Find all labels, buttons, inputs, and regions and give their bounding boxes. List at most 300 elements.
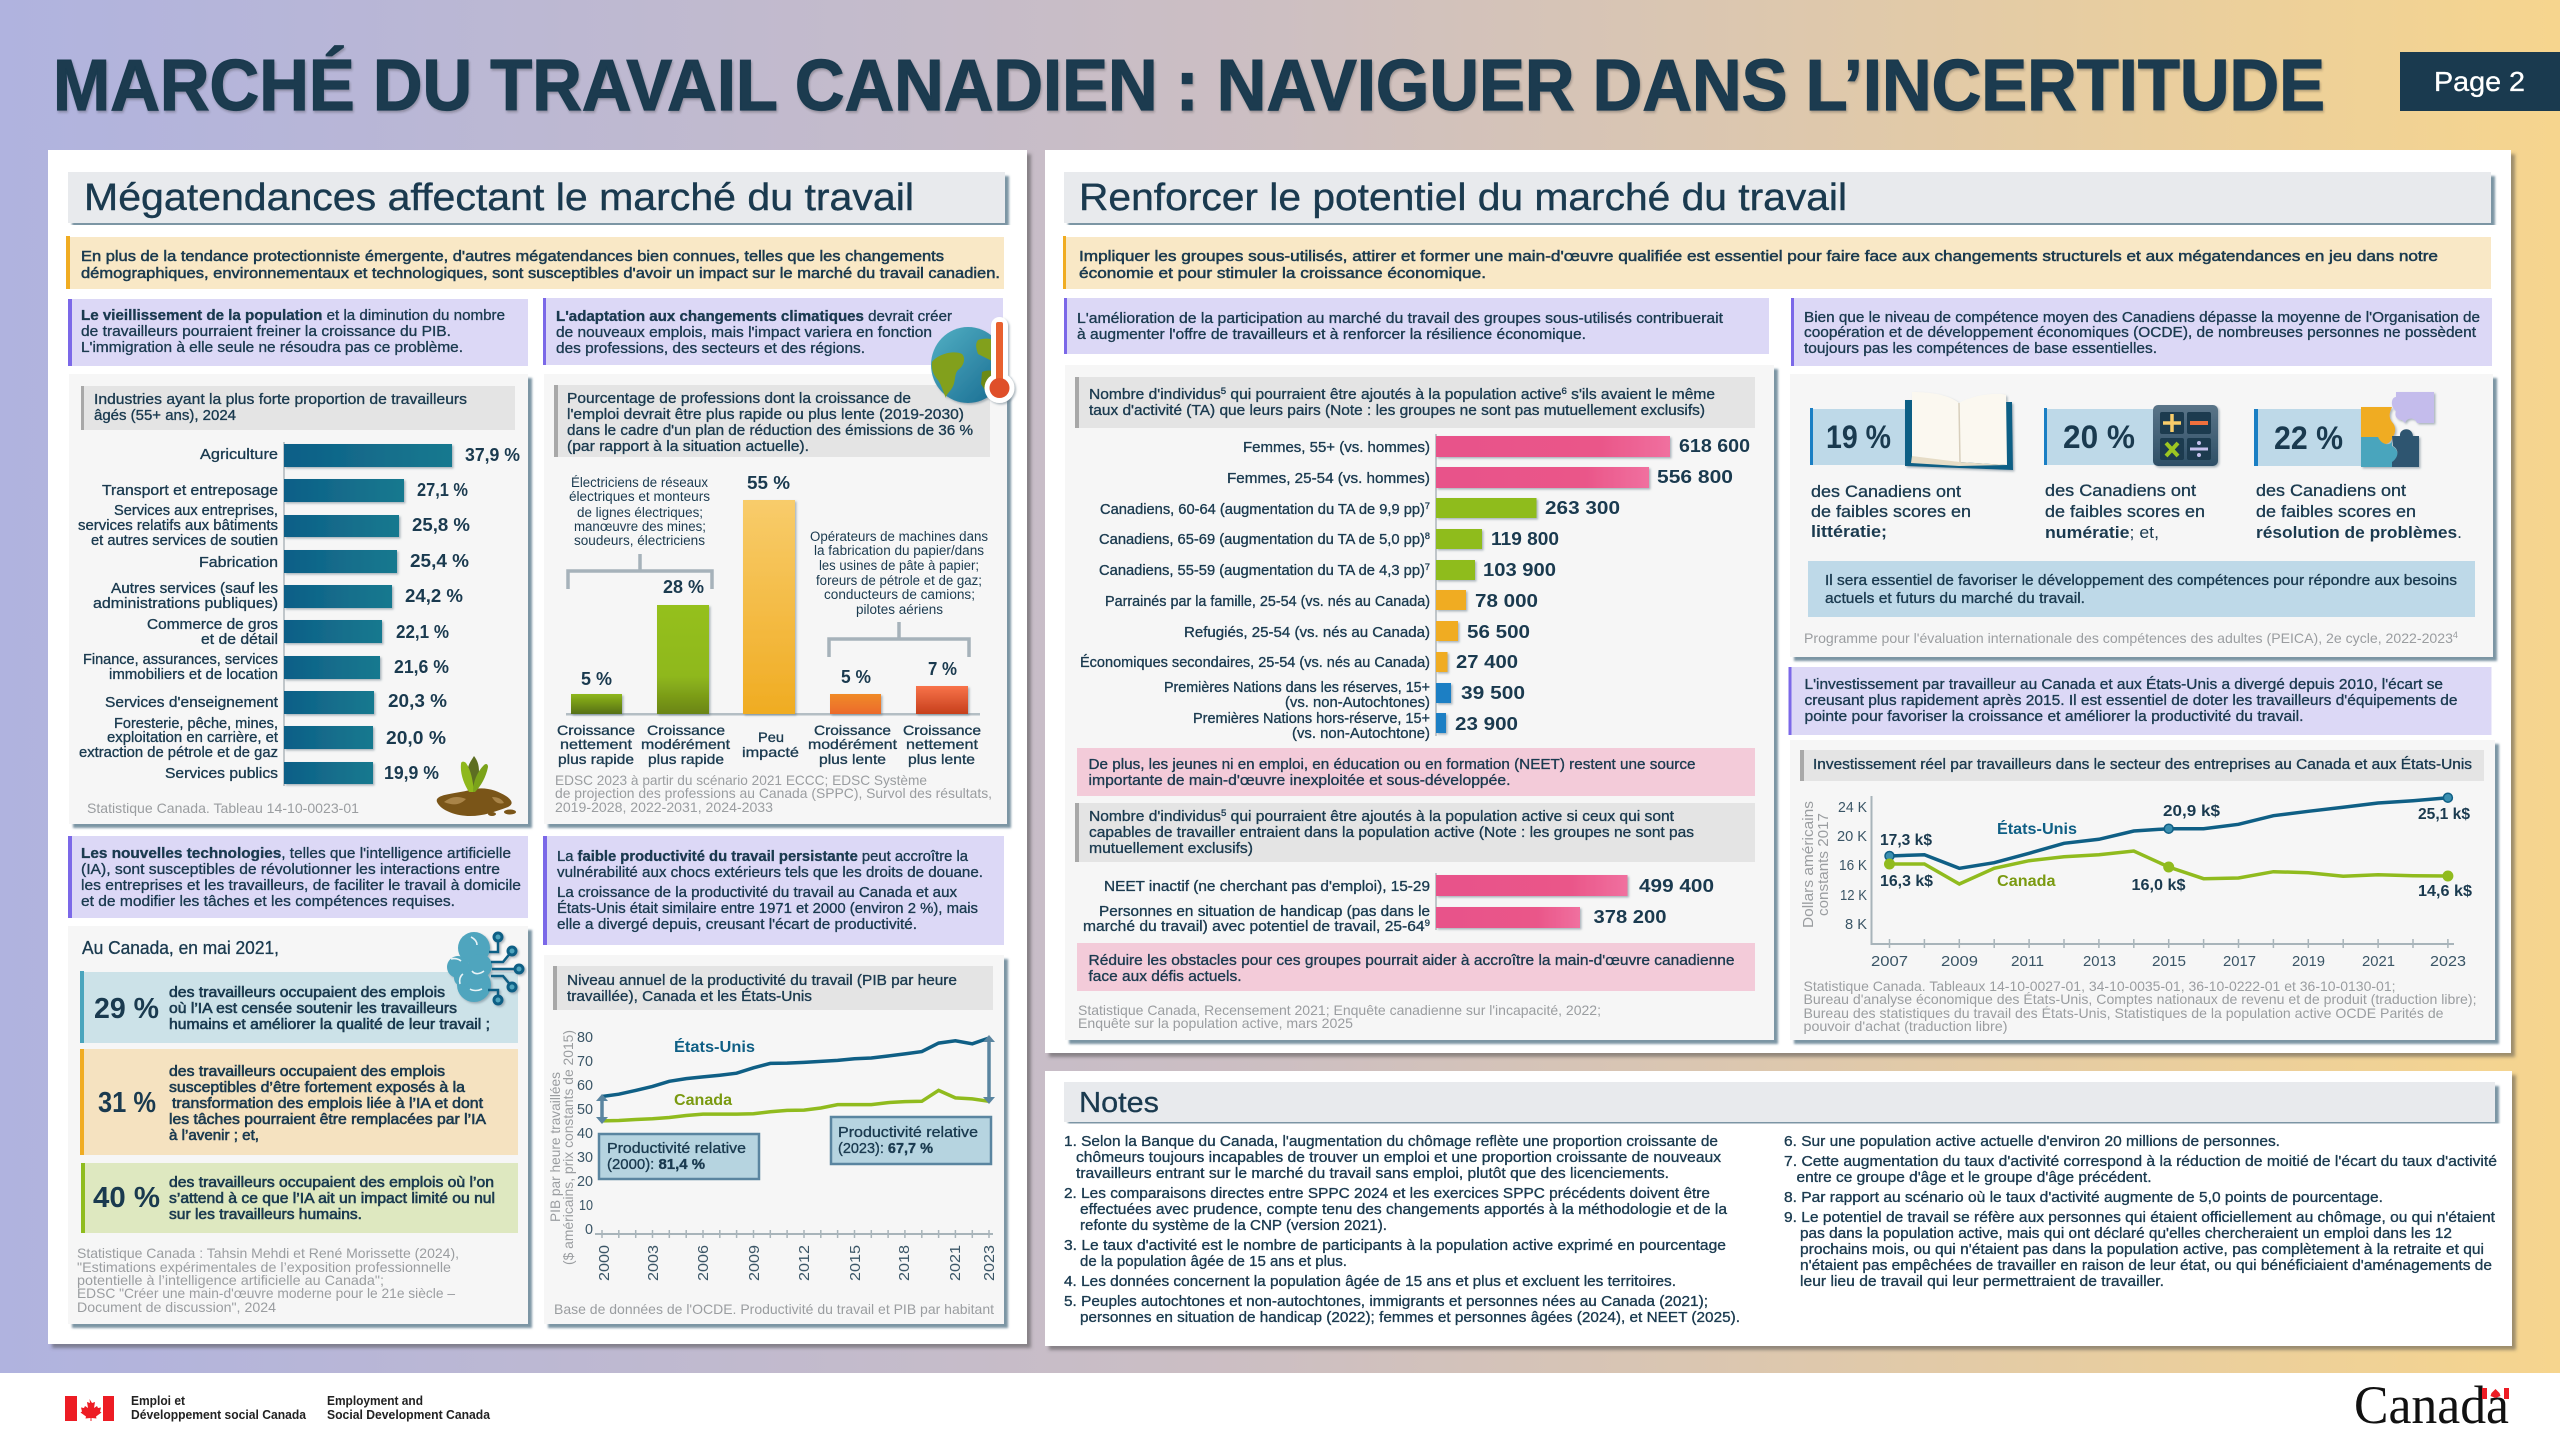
bar chart: industries: 20,3 % xyxy=(388,691,447,711)
card: productivité xyxy=(544,955,1004,1324)
text block: vieillissement: de travailleurs pourraient freiner la croissance du PIB. xyxy=(81,324,451,340)
heading: notes: Notes xyxy=(1079,1087,1159,1119)
stat: littératie: littératie; xyxy=(1811,522,1887,541)
text block: investissement: pointe pour favoriser la croissance et améliorer la productivité du travail. xyxy=(1804,709,2304,725)
annotation: professions en croissance xyxy=(568,475,712,589)
bar chart: groupes sous-utilisés: 7 xyxy=(1425,501,1430,511)
text block: productivité: La faible productivité du travail persistante peut accroître la xyxy=(557,849,969,865)
chart heading: industries xyxy=(81,386,515,430)
source: OCDE: Base de données de l'OCDE. Productivité du travail et PIB par habitant xyxy=(554,1301,994,1317)
callout: développement des compétences: actuels et futurs du marché du travail. xyxy=(1825,591,2085,607)
notes: right column: n'étaient pas empêchées de travailler en raison de leur état, ou qui bénéficiaient d'aménagements de xyxy=(1800,1258,2492,1274)
chart heading: individus 2: Nombre d'individus xyxy=(1089,809,1212,825)
line chart: productivité: 70 xyxy=(577,1054,593,1070)
bar chart: industries: Services d'enseignement xyxy=(105,695,278,711)
stat: 40 %: s’attend à ce que l’IA ait un impact limité ou nul xyxy=(169,1191,495,1207)
text block: compétences OCDE: Bien que le niveau de compétence moyen des Canadiens dépasse la moyenne de l'Organisation de xyxy=(1804,310,2480,326)
footer: government signature xyxy=(65,1393,491,1422)
notes: left column: 2. Les comparaisons directes entre SPPC 2024 et les exercices SPPC précédents doivent être xyxy=(1064,1186,1710,1202)
bar chart: industries: Services aux entreprises, xyxy=(114,503,278,519)
line chart: investissement: 17,3 k$ xyxy=(1880,832,1932,849)
chart heading: investissement: Investissement réel par travailleurs dans le secteur des entreprises au Canada et aux États-Unis xyxy=(1813,756,2472,773)
bar chart: industries: Fabrication xyxy=(199,555,278,571)
chart heading: individus 2: capables de travailler entraient dans la population active (Note : les groupes ne sont pas xyxy=(1089,825,1694,841)
callout: productivité relative 2000: (2000): 81,4 % xyxy=(607,1157,705,1173)
bar chart: professions: Croissance xyxy=(557,722,635,738)
annotation: professions en croissance: soudeurs, électriciens xyxy=(574,533,705,548)
stat: numératie xyxy=(2044,405,2218,542)
stat: 31 %: susceptibles d’être fortement exposés à la xyxy=(169,1080,466,1096)
signature: français xyxy=(131,1393,307,1422)
bar chart: groupes sous-utilisés: 556 800 xyxy=(1657,467,1733,487)
text block: productivité: vulnérabilité aux chocs extérieurs tels que les droits de douane. xyxy=(557,865,983,881)
annotation: professions en croissance: de lignes électriques; xyxy=(577,505,703,520)
callout: obstacles: Réduire les obstacles pour ces groupes pourrait aider à accroître la main-d'œuvre canadienne xyxy=(1088,953,1734,969)
callout: NEET: De plus, les jeunes ni en emploi, en éducation ou en formation (NEET) restent une source xyxy=(1088,757,1696,773)
callout: développement des compétences: Il sera essentiel de favoriser le développement des compétences pour répondre aux besoins xyxy=(1825,573,2457,589)
bar chart: NEET et handicap: 499 400 xyxy=(1639,876,1714,896)
source: IA: EDSC "Créer une main-d'œuvre moderne pour le 21e siècle – xyxy=(77,1285,455,1301)
heading: au Canada: Au Canada, en mai 2021, xyxy=(82,938,279,958)
line chart: productivité: ($ américains, prix constants de 2015) xyxy=(560,1030,576,1265)
bar chart: industries: et autres services de soutien xyxy=(91,533,278,549)
bar chart: professions: Croissance xyxy=(814,722,891,738)
source: investissement: Bureau d'analyse économique des États-Unis, Comptes nationaux de revenu et de produit (traduction libre); xyxy=(1804,991,2476,1007)
chart heading: professions: (par rapport à la situation actuelle). xyxy=(567,439,809,455)
stat: résolution de problèmes: des Canadiens ont xyxy=(2256,481,2406,500)
line chart: productivité: PIB par heure travaillées xyxy=(547,1072,563,1222)
chart heading: individus 2: mutuellement exclusifs) xyxy=(1089,841,1253,857)
bar chart: groupes sous-utilisés: (vs. non-Autochtones) xyxy=(1285,695,1430,711)
line chart: productivité: 2023 xyxy=(982,1245,998,1281)
stat: littératie: des Canadiens ont xyxy=(1811,482,1961,501)
line chart: investissement: 16 K xyxy=(1839,858,1867,874)
bar chart: professions: 7 % xyxy=(928,659,957,679)
line chart: productivité: 0 xyxy=(585,1222,593,1238)
line chart: productivité: États-Unis xyxy=(674,1037,755,1056)
annotation: professions en croissance: manœuvre des mines; xyxy=(574,519,706,534)
bar chart: industries: 20,0 % xyxy=(386,728,446,748)
stat: résolution de problèmes: résolution de problèmes. xyxy=(2256,523,2462,542)
notes: right column: 6. Sur une population active actuelle d'environ 20 millions de personnes. xyxy=(1784,1134,2280,1150)
bar chart: groupes sous-utilisés: 8 xyxy=(1425,531,1430,541)
chart heading: individus 1: qui pourraient être ajoutés à la population active xyxy=(1226,387,1561,403)
stat: 29 %: 29 % xyxy=(94,993,159,1025)
stat: 29 % xyxy=(80,971,518,1043)
bar chart: groupes sous-utilisés: 56 500 xyxy=(1467,622,1530,642)
source: professions: de projection des professions au Canada (SPPC), Survol des résultats, xyxy=(555,785,992,801)
page number badge xyxy=(2400,52,2560,111)
signature: english xyxy=(327,1393,491,1422)
bar chart: industries: Agriculture xyxy=(200,447,278,463)
bar chart: industries: 25,8 % xyxy=(412,515,470,535)
chart heading: individus 1 xyxy=(1075,377,1755,428)
bar chart: industries: immobiliers et de location xyxy=(109,667,278,683)
callout: intro mégatendances: démographiques, environnementaux et technologiques, sont susceptibles d'avoir un impact sur le marché du travail canadien. xyxy=(81,266,1000,282)
source: IA: Document de discussion", 2024 xyxy=(77,1299,276,1315)
stat: numératie: 20 % xyxy=(2063,419,2135,455)
signature: english: Social Development Canada xyxy=(327,1407,491,1422)
source: IA: potentielle à l’intelligence artificielle au Canada"; xyxy=(77,1272,384,1288)
bar chart: industries: 24,2 % xyxy=(405,586,463,606)
line chart: investissement: 2023 xyxy=(2430,954,2466,970)
bar chart: industries: 27,1 % xyxy=(417,480,468,500)
line chart: investissement: 2013 xyxy=(2083,954,2116,970)
source: investissement: Bureau des statistiques du travail des États-Unis, Statistiques de la population active OCDE Parités de xyxy=(1804,1005,2444,1021)
bar chart: industries: Transport et entreposage xyxy=(102,483,278,499)
bar chart: groupes sous-utilisés: 78 000 xyxy=(1475,591,1538,611)
text block: adaptation climatique: L'adaptation aux changements climatiques devrait créer xyxy=(556,309,952,325)
source: professions xyxy=(555,772,992,815)
line chart: investissement: 20,9 k$ xyxy=(2163,803,2220,820)
line chart: productivité: 60 xyxy=(577,1078,593,1094)
source: recensement xyxy=(1078,1002,1601,1031)
bar chart: groupes sous-utilisés: Canadiens, 60-64 (augmentation du TA de 9,9 pp) xyxy=(1100,502,1421,518)
callout: productivité relative 2023: (2023): 67,7 % xyxy=(838,1141,933,1157)
line chart: productivité: 20 xyxy=(577,1174,593,1190)
bar chart: groupes sous-utilisés: Femmes, 25-54 (vs. hommes) xyxy=(1227,471,1430,487)
bar chart: industries: administrations publiques) xyxy=(93,596,278,612)
text block: vieillissement: Le vieillissement de la population et la diminution du nombre xyxy=(81,308,505,324)
annotation: professions en déclin: foreurs de pétrole et de gaz; xyxy=(816,573,982,588)
bar chart: professions: plus rapide xyxy=(648,751,724,767)
bar chart: industries: Autres services (sauf les xyxy=(111,581,278,597)
text block: adaptation climatique: des professions, des secteurs et des régions. xyxy=(556,341,865,357)
chart heading: professions: l'emploi devrait être plus rapide ou plus lente (2019-2030) xyxy=(567,407,964,423)
stat: résolution de problèmes xyxy=(2254,392,2462,542)
panel: renforcer le potentiel xyxy=(1045,150,2511,1053)
chart heading: individus 1: Nombre d'individus xyxy=(1089,387,1212,403)
line chart: investissement: 8 K xyxy=(1845,917,1867,933)
text block: vieillissement xyxy=(68,299,528,366)
notes: left column: effectuées avec prudence, compte tenu des changements apportés à la méthodologie et de la xyxy=(1080,1202,1728,1218)
stat: résolution de problèmes: 22 % xyxy=(2274,420,2343,456)
bar chart: groupes sous-utilisés: 618 600 xyxy=(1679,436,1750,456)
card: investissement réel xyxy=(1790,740,2495,1040)
icon: canadian flag xyxy=(65,1396,114,1421)
card: industries travailleurs âgés xyxy=(69,374,528,824)
bar chart: industries: Services publics xyxy=(165,766,278,782)
bar chart: groupes sous-utilisés: Canadiens, 65-69 (augmentation du TA de 5,0 pp) xyxy=(1099,532,1420,548)
icon: open book xyxy=(1905,392,2013,470)
bar chart: groupes sous-utilisés: Parrainés par la famille, 25-54 (vs. nés au Canada) xyxy=(1105,594,1430,610)
source: industries: Statistique Canada. Tableau 14-10-0023-01 xyxy=(87,800,359,816)
icon: plant in soil xyxy=(437,756,516,816)
line chart: productivité xyxy=(547,1030,998,1281)
chart heading: productivité xyxy=(553,966,993,1010)
callout: productivité relative 2000: Productivité relative xyxy=(607,1141,746,1157)
stat: numératie: de faibles scores en xyxy=(2045,502,2205,521)
notes: left column: 4. Les données concernent la population âgée de 15 ans et plus et excluent les territoires. xyxy=(1064,1274,1676,1290)
bar chart: professions: plus lente xyxy=(819,751,886,767)
callout: NEET xyxy=(1077,748,1755,796)
line chart: productivité: 50 xyxy=(577,1102,593,1118)
source: IA: Statistique Canada : Tahsin Mehdi et René Morissette (2024), xyxy=(77,1245,459,1261)
bar chart: industries: 25,4 % xyxy=(410,551,469,571)
chart heading: individus 1: s'ils avaient le même xyxy=(1567,387,1715,403)
wordmark: Canada: Canada xyxy=(2354,1375,2509,1435)
line chart: investissement: 2015 xyxy=(2152,954,2186,970)
text block: investissement: creusant plus rapidement après 2015. Il est essentiel de doter les travailleurs d'équipements de xyxy=(1804,693,2458,709)
stat: numératie: des Canadiens ont xyxy=(2045,481,2196,500)
line chart: investissement: 25,1 k$ xyxy=(2418,806,2470,823)
bar chart: groupes sous-utilisés: Premières Nations dans les réserves, 15+ xyxy=(1164,680,1430,696)
callout: développement des compétences xyxy=(1808,561,2475,617)
bar chart: industries: extraction de pétrole et de gaz xyxy=(79,745,278,761)
source: PEICA: Programme pour l'évaluation internationale des compétences des adultes (PEICA), 2e cycle, 2022-2023 xyxy=(1804,630,2449,646)
bar chart: NEET et handicap: NEET inactif (ne cherchant pas d'emploi), 15-29 xyxy=(1104,879,1430,895)
icon: brain circuit xyxy=(447,932,523,1004)
line chart: investissement: constants 2017 xyxy=(1815,813,1832,916)
text block: participation: L'amélioration de la participation au marché du travail des groupes sous-utilisés contribuerait xyxy=(1077,311,1723,327)
line chart: investissement: 2011 xyxy=(2011,954,2044,970)
chart heading: professions: Pourcentage de professions dont la croissance de xyxy=(567,391,911,407)
heading: mégatendances xyxy=(68,172,1005,223)
line chart: productivité: 2009 xyxy=(747,1245,763,1281)
line chart: investissement: Canada xyxy=(1997,873,2056,890)
chart heading: investissement xyxy=(1800,750,2484,781)
notes: right column: 8. Par rapport au scénario où le taux d'activité augmente de 5,0 points de pourcentage. xyxy=(1784,1190,2383,1206)
line chart: investissement: 20 K xyxy=(1837,829,1867,845)
source: investissement: Statistique Canada. Tableaux 14-10-0027-01, 34-10-0035-01, 36-10-0222-01 et 36-10-0130-01; xyxy=(1804,978,2396,994)
bar chart: professions xyxy=(557,473,981,767)
annotation: professions en déclin xyxy=(810,529,988,657)
chart heading: industries: Industries ayant la plus forte proportion de travailleurs xyxy=(94,392,467,408)
bar chart: industries xyxy=(78,442,520,786)
chart heading: individus 1: taux d'activité (TA) que leurs pairs (Note : les groupes ne sont pas mutuellement exclusifs) xyxy=(1089,403,1705,419)
text block: compétences OCDE xyxy=(1791,298,2492,366)
text block: nouvelles technologies: les entreprises et les travailleurs, de faciliter le travail à domicile xyxy=(81,878,521,894)
line chart: investissement: 16,3 k$ xyxy=(1880,873,1933,890)
notes: left column: 3. Le taux d'activité est le nombre de participants à la population active exprimé en pourcentage xyxy=(1064,1238,1726,1254)
line chart: investissement: 2021 xyxy=(2362,954,2395,970)
card: compétences xyxy=(1790,374,2493,657)
callout: intro mégatendances xyxy=(66,236,1004,289)
text block: adaptation climatique xyxy=(543,298,1003,365)
notes: right column xyxy=(1784,1134,2497,1290)
source: investissement: pouvoir d'achat (traduction libre) xyxy=(1804,1018,2008,1034)
heading: mégatendances: Mégatendances affectant le marché du travail xyxy=(84,177,914,219)
bar chart: professions: modérément xyxy=(808,736,897,752)
bar chart: groupes sous-utilisés: 119 800 xyxy=(1491,529,1559,549)
callout: intro renforcer xyxy=(1063,236,2491,289)
bar chart: groupes sous-utilisés: 27 400 xyxy=(1456,652,1518,672)
notes: left column xyxy=(1064,1134,1740,1326)
annotation: professions en déclin: Opérateurs de machines dans xyxy=(810,529,988,544)
callout: intro renforcer: économie et pour stimuler la croissance économique. xyxy=(1079,266,1486,282)
line chart: productivité: 2000 xyxy=(597,1245,613,1281)
stat: littératie: de faibles scores en xyxy=(1811,502,1971,521)
stat: littératie xyxy=(1810,392,2013,541)
bar chart: professions: 5 % xyxy=(581,669,612,689)
text block: nouvelles technologies xyxy=(68,836,528,918)
chart heading: individus 2: 5 xyxy=(1221,808,1226,818)
line chart: investissement: 2019 xyxy=(2292,954,2325,970)
source: professions: EDSC 2023 à partir du scénario 2021 ECCC; EDSC Système xyxy=(555,772,927,788)
notes: left column: 1. Selon la Banque du Canada, l'augmentation du chômage reflète une proportion croissante de xyxy=(1064,1134,1718,1150)
callout: NEET: importante de main-d'œuvre inexploitée et sous-développée. xyxy=(1088,773,1510,789)
source: recensement: Statistique Canada, Recensement 2021; Enquête canadienne sur l'incapacité, 2022; xyxy=(1078,1002,1601,1018)
bar chart: professions: nettement xyxy=(560,736,632,752)
heading: renforcer: Renforcer le potentiel du marché du travail xyxy=(1079,177,1847,219)
text block: nouvelles technologies: Les nouvelles technologies , telles que l'intelligence artificielle xyxy=(81,846,511,862)
signature: français: Emploi et xyxy=(131,1393,186,1408)
bar chart: professions: impacté xyxy=(742,744,799,760)
callout: productivité relative 2023: Productivité relative xyxy=(838,1125,978,1141)
bar chart: professions: Peu xyxy=(758,729,784,745)
chart heading: professions: dans le cadre d'un plan de réduction des émissions de 36 % xyxy=(567,423,973,439)
title: MARCHÉ DU TRAVAIL CANADIEN : NAVIGUER DANS L’INCERTITUDE xyxy=(53,46,2325,126)
stat: résolution de problèmes: de faibles scores en xyxy=(2256,502,2416,521)
card: professions plan émissions xyxy=(544,374,1007,824)
stat: 31 %: transformation des emplois liée à l’IA et dont xyxy=(172,1096,483,1112)
bar chart: groupes sous-utilisés: 23 900 xyxy=(1455,714,1518,734)
heading: notes xyxy=(1064,1082,2495,1122)
card: exposition à l'IA xyxy=(68,836,1004,1324)
bar chart: professions: plus lente xyxy=(908,751,975,767)
stat: 40 %: des travailleurs occupaient des emplois où l’on xyxy=(169,1175,494,1191)
stat: 40 % xyxy=(81,1163,518,1233)
stat: numératie: numératie; et, xyxy=(2045,523,2159,542)
bar chart: groupes sous-utilisés: 103 900 xyxy=(1483,560,1556,580)
bar chart: NEET et handicap: 378 200 xyxy=(1594,907,1666,927)
line chart: investissement: 16,0 k$ xyxy=(2132,877,2186,894)
annotation: professions en croissance: Électriciens de réseaux xyxy=(571,475,708,490)
bar chart: NEET et handicap: 9 xyxy=(1425,918,1430,928)
text block: vieillissement: L'immigration à elle seule ne résoudra pas ce problème. xyxy=(81,340,463,356)
stat: 31 %: les tâches pourraient être remplacées par l’IA xyxy=(169,1112,486,1128)
text block: productivité: elle a divergé depuis, creusant l'écart de productivité. xyxy=(557,917,917,933)
bar chart: industries: Commerce de gros xyxy=(147,617,278,633)
bar chart: industries: Foresterie, pêche, mines, xyxy=(114,716,278,732)
chart heading: productivité: travaillée), Canada et les États-Unis xyxy=(567,988,812,1005)
signature: français: Développement social Canada xyxy=(131,1407,307,1422)
bar chart: industries: 37,9 % xyxy=(465,445,520,465)
notes: left column: chômeurs toujours incapables de trouver un emploi et une proportion croissante de nouveaux xyxy=(1076,1150,1722,1166)
line chart: investissement: 14,6 k$ xyxy=(2418,883,2472,900)
notes: left column: de la population âgée de 15 ans et plus. xyxy=(1080,1254,1347,1270)
source: IA: "Estimations expérimentales de l’exposition professionnelle xyxy=(77,1259,451,1275)
stat: 29 %: où l’IA est censée soutenir les travailleurs xyxy=(169,1001,457,1017)
annotation: professions en déclin: la fabrication du papier/dans xyxy=(814,543,984,558)
bar chart: professions: Croissance xyxy=(647,722,725,738)
text block: productivité: États-Unis était similaire entre 1971 et 2000 (environ 2 %), mais xyxy=(557,900,978,917)
icon: puzzle pieces xyxy=(2361,392,2434,467)
source: PEICA: 4 xyxy=(2453,630,2458,640)
source: investissement xyxy=(1804,978,2476,1034)
notes: right column: 7. Cette augmentation du taux d'activité correspond à la réduction de moitié de l'écart du taux d'activité xyxy=(1784,1154,2497,1170)
chart heading: individus 1: 6 xyxy=(1561,386,1567,396)
signature: english: Employment and xyxy=(327,1393,423,1408)
stat: 31 % xyxy=(80,1049,518,1155)
text block: productivité: La croissance de la productivité du travail au Canada et aux xyxy=(557,885,958,901)
line chart: productivité: 30 xyxy=(577,1150,593,1166)
line chart: productivité: 80 xyxy=(577,1030,593,1046)
bar chart: groupes sous-utilisés: 7 xyxy=(1425,562,1430,572)
chart heading: productivité: Niveau annuel de la productivité du travail (PIB par heure xyxy=(567,973,957,989)
line chart: investissement: Dollars américains xyxy=(1800,801,1817,928)
bar chart: NEET et handicap: marché du travail) avec potentiel de travail, 25-64 xyxy=(1083,919,1401,935)
bar chart: industries: Finance, assurances, services xyxy=(83,652,278,668)
source: IA xyxy=(77,1245,459,1315)
line chart: investissement: 2009 xyxy=(1941,954,1978,970)
annotation: professions en déclin: les usines de pâte à papier; xyxy=(819,558,979,573)
text block: productivité xyxy=(543,836,1004,945)
chart heading: individus 2: qui pourraient être ajoutés à la population active si ceux qui sont xyxy=(1226,809,1674,825)
bar chart: groupes sous-utilisés: Premières Nations hors-réserve, 15+ xyxy=(1193,711,1430,727)
bar chart: industries: et de détail xyxy=(201,632,278,648)
chart heading: professions xyxy=(554,385,990,457)
bar chart: NEET et handicap xyxy=(1083,873,1714,935)
text block: nouvelles technologies: (IA), sont susceptibles de révolutionner les interactions entre xyxy=(81,862,500,878)
card: population active potentielle xyxy=(1065,365,1774,1040)
bar chart: groupes sous-utilisés: 39 500 xyxy=(1461,683,1525,703)
bar chart: industries: exploitation en carrière, et xyxy=(107,730,278,746)
callout: obstacles xyxy=(1077,943,1755,991)
line chart: productivité: 2012 xyxy=(797,1245,813,1281)
line chart: investissement: 12 K xyxy=(1840,888,1867,904)
line chart: productivité: Canada xyxy=(674,1092,732,1109)
icon: globe with thermometer xyxy=(931,317,1014,403)
bar chart: industries: services relatifs aux bâtiments xyxy=(78,518,278,534)
callout: productivité relative 2000 xyxy=(599,1134,759,1179)
bar chart: groupes sous-utilisés: (vs. non-Autochtone) xyxy=(1292,726,1430,742)
icon: calculator xyxy=(2153,405,2218,466)
line chart: investissement: États-Unis xyxy=(1997,819,2077,838)
stat: 29 %: des travailleurs occupaient des emplois xyxy=(169,985,445,1001)
line chart: productivité: 10 xyxy=(579,1198,593,1214)
page number badge: Page 2 xyxy=(2434,66,2525,97)
line chart: productivité: 2018 xyxy=(897,1245,913,1281)
notes: right column: pas dans la population active, mais qui ont déclaré qu'elles chercheraient un emploi dans les 12 xyxy=(1800,1226,2452,1242)
line chart: productivité: 2003 xyxy=(646,1245,662,1281)
line chart: productivité: 40 xyxy=(577,1126,593,1142)
line chart: investissement xyxy=(1800,793,2472,970)
bar chart: professions: plus rapide xyxy=(558,751,634,767)
text block: nouvelles technologies: et de modifier les tâches et les compétences requises. xyxy=(81,894,455,910)
text block: adaptation climatique: de nouveaux emplois, mais l'impact variera en fonction xyxy=(556,325,932,341)
bar chart: professions: 28 % xyxy=(663,577,704,597)
bar chart: professions: 55 % xyxy=(747,473,790,493)
bar chart: groupes sous-utilisés: Femmes, 55+ (vs. hommes) xyxy=(1243,440,1430,456)
notes: right column: entre ce groupe d'âge et le groupe d'âge précédent. xyxy=(1796,1170,2152,1186)
text block: participation xyxy=(1064,298,1769,354)
stat: 40 %: sur les travailleurs humains. xyxy=(169,1207,362,1223)
bar chart: industries: 19,9 % xyxy=(384,763,439,783)
notes: left column: personnes en situation de handicap (2022); femmes et personnes âgées (2024), et NEET (2025). xyxy=(1080,1310,1740,1326)
heading: renforcer xyxy=(1064,172,2491,223)
notes: right column: prochains mois, ou qui n'étaient pas dans la population active, pas complètement à la retraite et qui xyxy=(1800,1242,2484,1258)
notes: left column: 5. Peuples autochtones et non-autochtones, immigrants et personnes nées au Canada (2021); xyxy=(1064,1294,1708,1310)
line chart: investissement: 24 K xyxy=(1838,800,1867,816)
stat: 31 %: des travailleurs occupaient des emplois xyxy=(169,1064,445,1080)
callout: obstacles: face aux défis actuels. xyxy=(1088,969,1242,985)
bar chart: groupes sous-utilisés: 263 300 xyxy=(1545,498,1620,518)
bar chart: groupes sous-utilisés: Canadiens, 55-59 (augmentation du TA de 4,3 pp) xyxy=(1099,563,1420,579)
bar chart: groupes sous-utilisés: Économiques secondaires, 25-54 (vs. nés au Canada) xyxy=(1080,654,1430,671)
callout: productivité relative 2023 xyxy=(831,1117,991,1164)
notes: left column: refonte du système de la CNP (version 2021). xyxy=(1080,1218,1387,1234)
stat: 31 %: à l’avenir ; et, xyxy=(169,1128,259,1144)
callout: intro renforcer: Impliquer les groupes sous-utilisés, attirer et former une main-d'œuvre qualifiée est essentiel pour faire face aux changements structurels et aux mégatendances en jeu dans notre xyxy=(1079,249,2438,265)
bar chart: professions: 5 % xyxy=(841,667,871,687)
stat: 31 %: 31 % xyxy=(98,1087,156,1119)
annotation: professions en déclin: pilotes aériens xyxy=(856,602,943,617)
text block: participation: à augmenter l'offre de travailleurs et à renforcer la résilience économique. xyxy=(1077,327,1586,343)
annotation: professions en croissance: électriques et monteurs xyxy=(569,489,710,504)
bar chart: NEET et handicap: Personnes en situation de handicap (pas dans le xyxy=(1099,904,1430,920)
line chart: productivité: 2021 xyxy=(948,1245,964,1281)
